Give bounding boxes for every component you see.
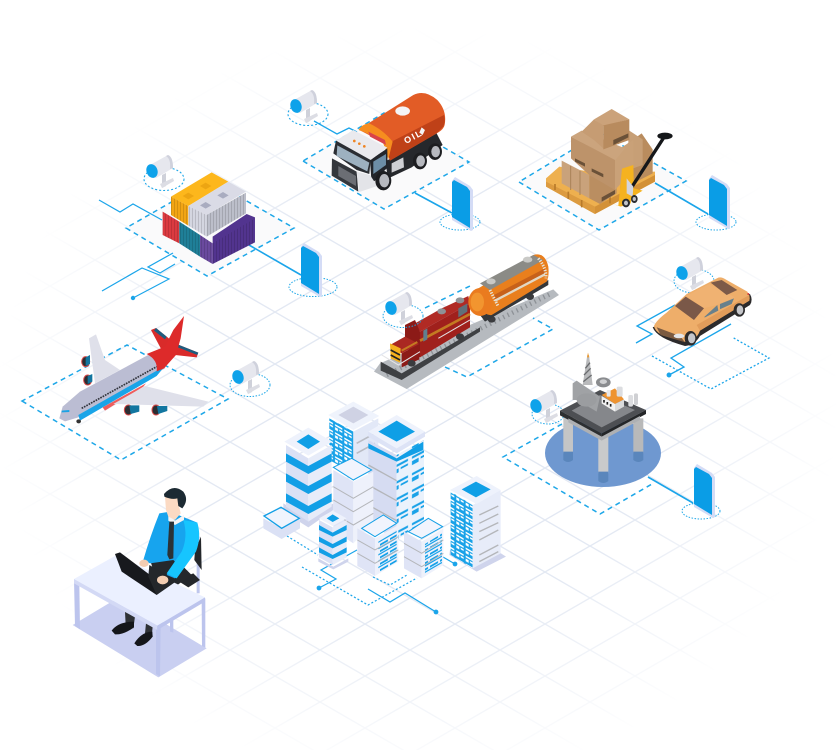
- dashed zone: airplane: [22, 345, 228, 460]
- circuit line: oil platform: [648, 477, 693, 503]
- dashed zone: boxes: [519, 133, 686, 230]
- floor plate: [73, 597, 207, 677]
- panel: cardboard boxes: [519, 109, 736, 230]
- hands: [139, 560, 168, 584]
- tower: small banded: [318, 511, 348, 569]
- server stack B: [404, 518, 443, 578]
- head: [164, 488, 186, 520]
- dashed zone: truck: [303, 113, 469, 209]
- locomotive and tank wagon on rails: [374, 254, 559, 389]
- laptop: [115, 552, 177, 595]
- desk: [74, 555, 205, 677]
- dashed zone: train: [425, 285, 553, 377]
- torso: [143, 512, 199, 587]
- airplane: [59, 316, 208, 423]
- panel: airplane: [22, 316, 270, 460]
- tower: back grey: [328, 402, 379, 473]
- camera: airplane: [230, 361, 270, 396]
- circuit lines: containers: [99, 200, 301, 300]
- phone: containers: [289, 243, 337, 297]
- panel: car: [636, 257, 769, 389]
- tower: tall centre: [368, 415, 425, 540]
- camera: car: [674, 257, 714, 293]
- chair: [177, 537, 202, 593]
- flat server: [263, 507, 300, 539]
- tower: right: [449, 476, 506, 572]
- circuit line: boxes: [655, 183, 708, 214]
- oil tanker truck: [332, 93, 445, 192]
- network lines: servers: [287, 536, 457, 614]
- legs and shoes: [112, 612, 153, 646]
- panel: train: [374, 254, 559, 389]
- phone: truck: [440, 177, 480, 231]
- server towers: [263, 402, 506, 578]
- oil tanker truck: OIL: [402, 128, 425, 146]
- container stack: [163, 172, 255, 264]
- tower: blue-banded left: [283, 428, 333, 527]
- pallet with boxes and pallet truck: [546, 109, 673, 214]
- dashed zone: containers: [126, 180, 294, 276]
- camera: oil platform: [528, 390, 564, 424]
- camera: truck: [288, 90, 328, 126]
- panel: oil platform: [503, 353, 720, 519]
- phone: oil platform: [682, 464, 720, 519]
- panel: server cluster: [263, 402, 506, 614]
- panel: operator at desk: [73, 488, 207, 677]
- dashed zone: oil platform: [503, 424, 652, 514]
- camera: train: [383, 292, 423, 328]
- orange car: [653, 277, 752, 346]
- panel: oil truck: [288, 90, 480, 231]
- tower: stacked white: [333, 458, 373, 543]
- offshore rig: [560, 353, 646, 483]
- circuit lines: car: [636, 305, 769, 389]
- camera: containers: [144, 155, 184, 190]
- blue water disc: [545, 419, 661, 487]
- server stack A: [357, 515, 398, 576]
- panel: containers: [99, 155, 337, 300]
- circuit lines: truck: [314, 121, 452, 213]
- phone: boxes: [696, 175, 736, 230]
